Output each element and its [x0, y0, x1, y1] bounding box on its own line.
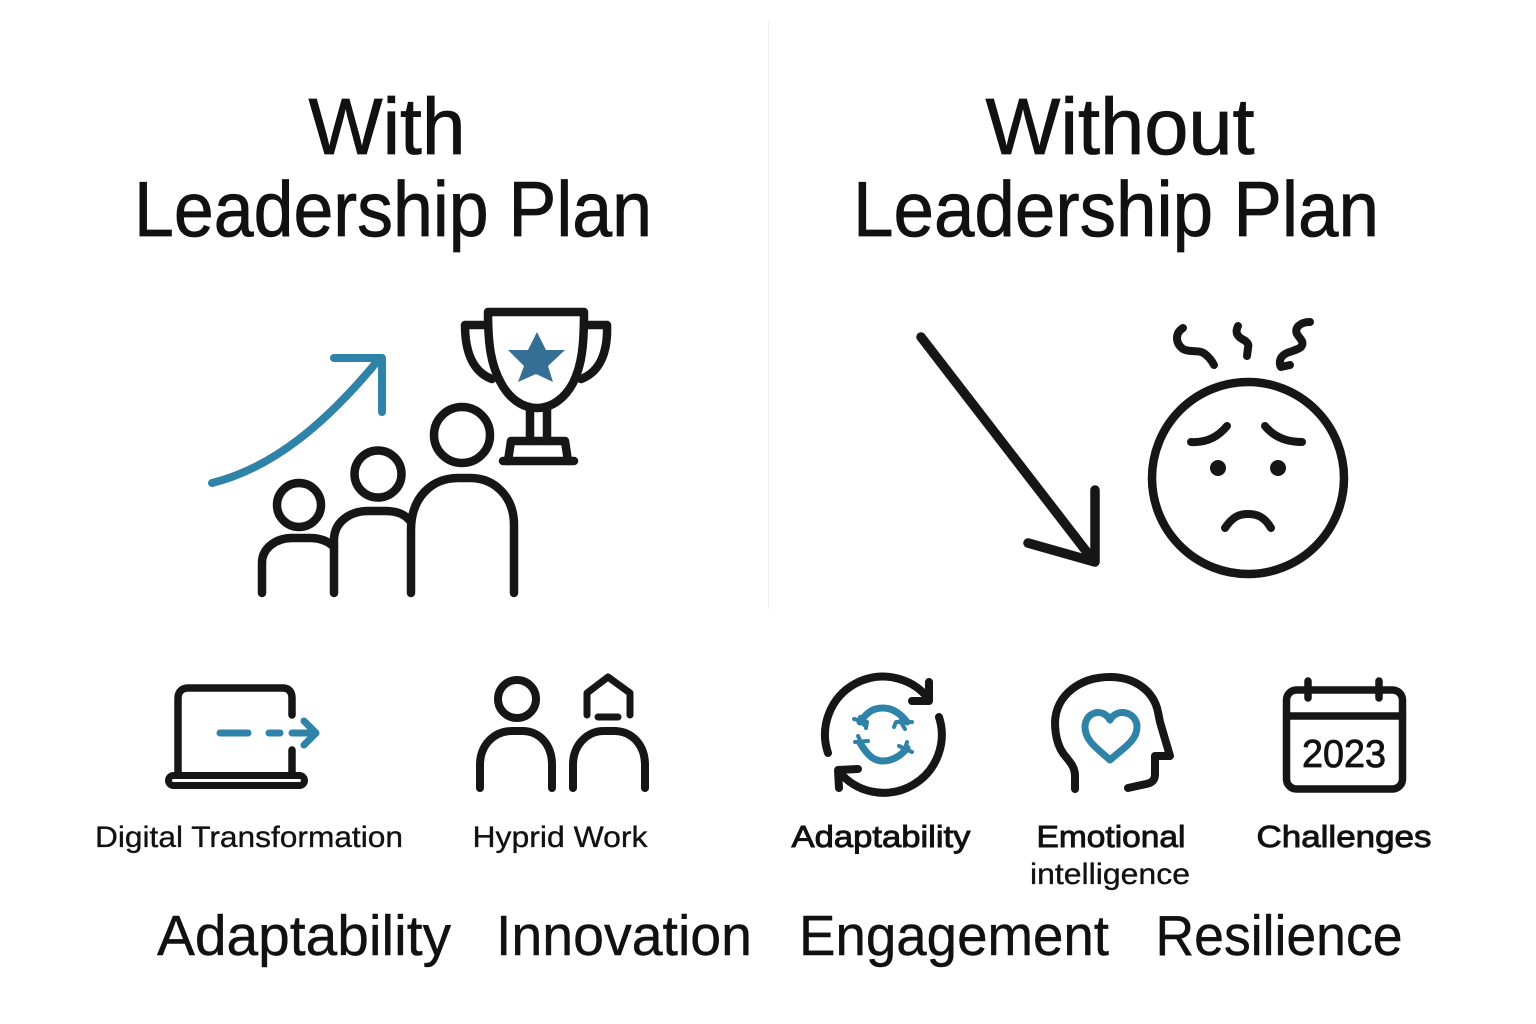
- icon: laptop with arrow: [168, 688, 316, 786]
- label: digital transformation: Digital Transformation: [95, 821, 403, 854]
- label: adaptability: Adaptability: [792, 819, 971, 854]
- icon: head with heart: [1055, 677, 1170, 789]
- title: without leadership plan: Without: [986, 82, 1254, 171]
- icon: team of three people: [262, 407, 514, 593]
- title: with leadership plan: With: [308, 82, 466, 171]
- outcome: adaptability: Adaptability: [157, 904, 451, 968]
- icon: trophy: [465, 312, 607, 461]
- title: without leadership plan: Leadership Plan: [853, 165, 1379, 253]
- icon: falling arrow: [921, 337, 1095, 562]
- outcome: innovation: Innovation: [496, 904, 752, 968]
- icon: stressed face: [1152, 322, 1344, 574]
- outcome: resilience: Resilience: [1156, 904, 1402, 968]
- label: emotional intelligence: [1030, 819, 1190, 891]
- icon: rising arrow: [212, 358, 382, 483]
- icon: calendar 2023: [1286, 681, 1402, 789]
- icon: person and home person: [480, 677, 645, 788]
- icon: adaptability cycle: [825, 677, 942, 793]
- title: with leadership plan: Leadership Plan: [134, 165, 652, 253]
- label: challenges: Challenges: [1256, 819, 1432, 854]
- label: emotional intelligence: Emotional: [1036, 819, 1186, 854]
- outcome: engagement: Engagement: [799, 904, 1109, 968]
- label: emotional intelligence: intelligence: [1030, 858, 1190, 891]
- label: hybrid work: Hyprid Work: [472, 821, 649, 854]
- icon: calendar 2023: 2023: [1302, 733, 1386, 776]
- title: with leadership plan: [134, 82, 652, 253]
- title: without leadership plan: [853, 82, 1379, 253]
